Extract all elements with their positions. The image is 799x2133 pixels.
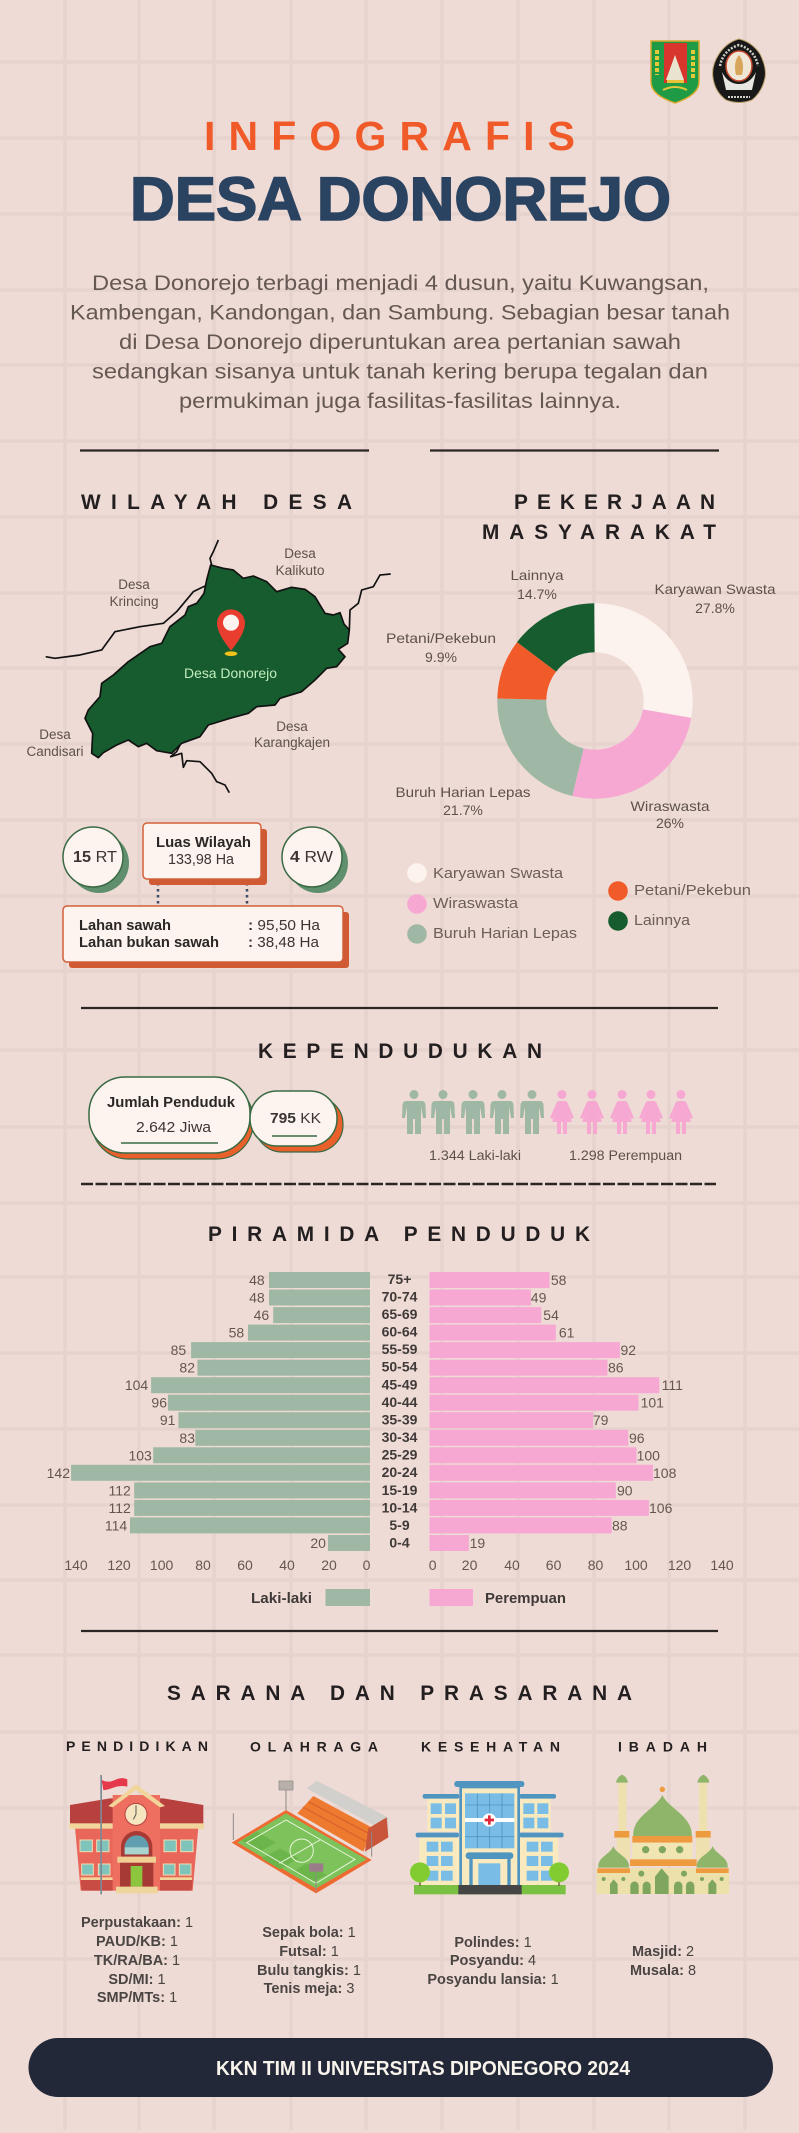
male values: 48 <box>249 1272 265 1288</box>
female bars <box>430 1272 659 1551</box>
age group labels: 60-64 <box>382 1324 418 1340</box>
logo: kabupaten shield <box>651 41 699 103</box>
x axis labels: 0 <box>429 1557 437 1573</box>
age group labels: 10-14 <box>382 1499 418 1515</box>
facts: olahraga: Bulu tangkis: 1 <box>257 1963 361 1979</box>
facts: kesehatan: Posyandu: 4 <box>450 1953 536 1969</box>
icons: female figures <box>550 1090 693 1134</box>
facts: kesehatan <box>427 1935 559 1988</box>
male values: 104 <box>125 1377 148 1393</box>
icon: stadium <box>232 1781 388 1893</box>
male values: 142 <box>47 1465 70 1481</box>
facts: pendidikan <box>81 1915 193 2006</box>
map: desa donorejo <box>46 540 391 793</box>
male values: 82 <box>179 1360 195 1376</box>
pyramid legend: perempuan <box>430 1589 566 1607</box>
female values: 54 <box>543 1307 559 1323</box>
map labels: neighbouring villages: Desa <box>118 577 150 592</box>
map label: donorejo: Desa Donorejo <box>184 665 277 681</box>
facts: kesehatan: Posyandu lansia: 1 <box>427 1972 559 1988</box>
map labels: neighbouring villages: Candisari <box>26 744 84 759</box>
female values: 101 <box>641 1395 664 1411</box>
heading: kependudukan: KEPENDUDUKAN <box>258 1040 542 1063</box>
donut legend: Buruh Harian Lepas <box>433 925 577 942</box>
heading: sarana dan prasarana: SARANA DAN PRASARANA <box>167 1682 632 1705</box>
heading: pekerjaan masyarakat <box>482 491 716 544</box>
donut labels: 26% <box>656 815 684 831</box>
map labels: neighbouring villages: Desa <box>276 719 308 734</box>
x axis labels: 60 <box>546 1557 562 1573</box>
female values: 58 <box>551 1272 567 1288</box>
female values: 92 <box>620 1342 636 1358</box>
title: desa donorejo: DESA DONOREJO <box>130 165 671 233</box>
facts: pendidikan: TK/RA/BA: 1 <box>94 1953 180 1969</box>
facts: olahraga: Futsal: 1 <box>279 1944 339 1960</box>
pyramid legend: laki-laki: Laki-laki <box>251 1591 312 1607</box>
label: male count: 1.344 Laki-laki <box>429 1148 521 1163</box>
male values: 112 <box>108 1500 131 1516</box>
age group labels: 75+ <box>388 1271 411 1287</box>
x axis labels: 40 <box>279 1557 295 1573</box>
male values: 58 <box>229 1324 244 1340</box>
donut labels: Lainnya <box>510 567 564 583</box>
footer banner: KKN TIM II UNIVERSITAS DIPONEGORO 2024 <box>216 2058 631 2080</box>
icons: male figures <box>402 1090 544 1134</box>
icon: hospital <box>410 1781 569 1894</box>
x axis labels: 60 <box>237 1557 253 1573</box>
female values: 49 <box>531 1290 547 1306</box>
age group labels: 35-39 <box>382 1411 418 1427</box>
facts: pendidikan: Perpustakaan: 1 <box>81 1915 193 1931</box>
male values: 114 <box>105 1517 127 1533</box>
subheading: kesehatan: KESEHATAN <box>421 1738 560 1754</box>
card: luas wilayah: 133,98 Ha <box>168 852 235 868</box>
female values <box>470 1272 683 1551</box>
badge: 4 RW <box>282 827 348 893</box>
female values: 111 <box>662 1377 683 1393</box>
x axis labels: 0 <box>363 1557 371 1573</box>
map labels: neighbouring villages <box>26 546 330 759</box>
male values: 103 <box>128 1447 152 1463</box>
male values: 20 <box>310 1535 326 1551</box>
card: jumlah penduduk: Jumlah Penduduk <box>107 1095 236 1111</box>
subheading: ibadah: IBADAH <box>618 1738 707 1754</box>
male values: 91 <box>160 1412 176 1428</box>
subheading: olahraga: OLAHRAGA <box>250 1738 378 1754</box>
card: lahan: : 38,48 Ha <box>248 935 320 951</box>
facts: ibadah <box>630 1944 696 1979</box>
card: luas wilayah <box>143 823 267 885</box>
facts: olahraga: Sepak bola: 1 <box>262 1925 356 1941</box>
donut legend: Wiraswasta <box>433 895 519 912</box>
age group labels: 15-19 <box>382 1482 418 1498</box>
icon: location pin <box>217 609 245 656</box>
village area <box>85 565 349 758</box>
heading: wilayah desa: WILAYAH DESA <box>81 491 352 514</box>
female values: 19 <box>470 1535 485 1551</box>
male values: 83 <box>179 1430 195 1446</box>
age group labels: 20-24 <box>382 1464 418 1480</box>
female values: 86 <box>608 1360 624 1376</box>
age group labels: 40-44 <box>382 1394 418 1410</box>
title: infografis: INFOGRAFIS <box>204 113 575 159</box>
heading: pekerjaan masyarakat: MASYARAKAT <box>482 521 716 544</box>
age group labels: 65-69 <box>382 1306 418 1322</box>
donut labels: Buruh Harian Lepas <box>396 784 530 800</box>
donut labels: 9.9% <box>425 649 457 665</box>
donut labels: Petani/Pekebun <box>386 630 496 646</box>
pyramid legend: laki-laki <box>251 1589 370 1607</box>
map labels: neighbouring villages: Desa <box>39 727 71 742</box>
badge: 15 RT <box>63 827 129 893</box>
donut legend: Petani/Pekebun <box>634 882 751 899</box>
logo: universitas diponegoro <box>713 39 765 102</box>
intro paragraph <box>70 272 730 413</box>
donut legend: Lainnya <box>634 912 691 929</box>
male values: 85 <box>171 1342 186 1358</box>
card: lahan: : 95,50 Ha <box>248 918 321 934</box>
facts: kesehatan: Polindes: 1 <box>454 1935 532 1951</box>
donut labels: 27.8% <box>695 600 735 616</box>
map labels: neighbouring villages: Karangkajen <box>254 735 330 750</box>
population pyramid chart <box>47 1271 734 1573</box>
label: female count: 1.298 Perempuan <box>569 1148 682 1163</box>
map labels: neighbouring villages: Desa <box>284 546 316 561</box>
intro paragraph: permukiman juga fasilitas-fasilitas lainnya. <box>179 390 621 413</box>
male values: 48 <box>249 1290 265 1306</box>
pyramid legend: perempuan: Perempuan <box>485 1591 566 1607</box>
x axis labels: 20 <box>321 1557 337 1573</box>
map labels: neighbouring villages: Krincing <box>110 594 158 609</box>
facts: ibadah: Musala: 8 <box>630 1963 696 1979</box>
x axis labels: 20 <box>462 1557 478 1573</box>
intro paragraph: Desa Donorejo terbagi menjadi 4 dusun, yaitu Kuwangsan, <box>92 272 709 295</box>
subheading: pendidikan: PENDIDIKAN <box>66 1738 208 1754</box>
boundary lines <box>46 540 391 793</box>
x axis labels: 80 <box>588 1557 603 1573</box>
badge: 15 RT: 15 RT <box>73 849 117 866</box>
icon: mosque <box>597 1775 729 1894</box>
female values: 61 <box>559 1324 575 1340</box>
card: lahan <box>63 906 349 968</box>
card: lahan: Lahan sawah <box>79 918 171 934</box>
x axis labels: 140 <box>710 1557 734 1573</box>
facts: pendidikan: SMP/MTs: 1 <box>97 1990 177 2006</box>
age group labels: 0-4 <box>389 1535 410 1551</box>
facts: olahraga <box>257 1925 361 1997</box>
age group labels <box>382 1271 418 1551</box>
donut legend <box>407 863 751 944</box>
x axis labels: 40 <box>504 1557 520 1573</box>
card: jumlah penduduk: 2.642 Jiwa <box>136 1120 212 1136</box>
female values: 79 <box>593 1412 609 1428</box>
age group labels: 25-29 <box>382 1447 418 1463</box>
x axis labels: 120 <box>107 1557 131 1573</box>
map labels: neighbouring villages: Kalikuto <box>276 563 324 578</box>
male values <box>47 1272 326 1551</box>
age group labels: 70-74 <box>382 1288 418 1304</box>
card: jumlah kk: 795 KK <box>270 1111 321 1127</box>
facts: pendidikan: SD/MI: 1 <box>108 1972 166 1988</box>
donut labels: Karyawan Swasta <box>654 581 776 597</box>
female values: 106 <box>649 1500 673 1516</box>
female values: 90 <box>617 1482 633 1498</box>
card: jumlah kk <box>250 1091 343 1152</box>
intro paragraph: sedangkan sisanya untuk tanah kering berupa tegalan dan <box>92 360 708 384</box>
x axis labels: 120 <box>668 1557 691 1573</box>
male values: 96 <box>151 1395 167 1411</box>
donut labels: 14.7% <box>517 586 557 602</box>
donut legend: Karyawan Swasta <box>433 865 564 882</box>
female values: 88 <box>612 1517 628 1533</box>
age group labels: 30-34 <box>382 1429 418 1445</box>
donut labels <box>386 567 776 831</box>
facts: ibadah: Masjid: 2 <box>632 1944 694 1960</box>
x axis labels: 80 <box>195 1557 211 1573</box>
male values: 46 <box>254 1307 269 1323</box>
badge: 4 RW: 4 RW <box>290 849 334 866</box>
female values: 100 <box>637 1447 660 1463</box>
facts: olahraga: Tenis meja: 3 <box>264 1981 354 1997</box>
x axis labels: 100 <box>150 1557 173 1573</box>
donut labels: Wiraswasta <box>630 798 710 814</box>
heading: piramida penduduk: PIRAMIDA PENDUDUK <box>208 1223 590 1246</box>
card: jumlah penduduk <box>89 1077 253 1159</box>
heading: pekerjaan masyarakat: PEKERJAAN <box>514 491 715 514</box>
age group labels: 5-9 <box>389 1517 410 1533</box>
footer banner <box>28 2038 773 2097</box>
icon: school <box>69 1775 204 1894</box>
x axis labels <box>64 1557 734 1573</box>
female values: 96 <box>629 1430 645 1446</box>
card: luas wilayah: Luas Wilayah <box>156 835 251 851</box>
donut chart: pekerjaan <box>522 628 668 774</box>
facts: pendidikan: PAUD/KB: 1 <box>96 1934 178 1950</box>
x axis labels: 100 <box>624 1557 648 1573</box>
male bars <box>71 1272 370 1551</box>
x axis labels: 140 <box>64 1557 88 1573</box>
female values: 108 <box>653 1465 677 1481</box>
age group labels: 55-59 <box>382 1341 418 1357</box>
intro paragraph: Kambengan, Kandongan, dan Sambung. Sebagian besar tanah <box>70 302 730 324</box>
male values: 112 <box>108 1482 131 1498</box>
age group labels: 50-54 <box>382 1359 418 1375</box>
donut labels: 21.7% <box>443 802 483 818</box>
intro paragraph: di Desa Donorejo diperuntukan area pertanian sawah <box>119 331 681 354</box>
card: lahan: Lahan bukan sawah <box>79 935 219 951</box>
age group labels: 45-49 <box>382 1376 418 1392</box>
